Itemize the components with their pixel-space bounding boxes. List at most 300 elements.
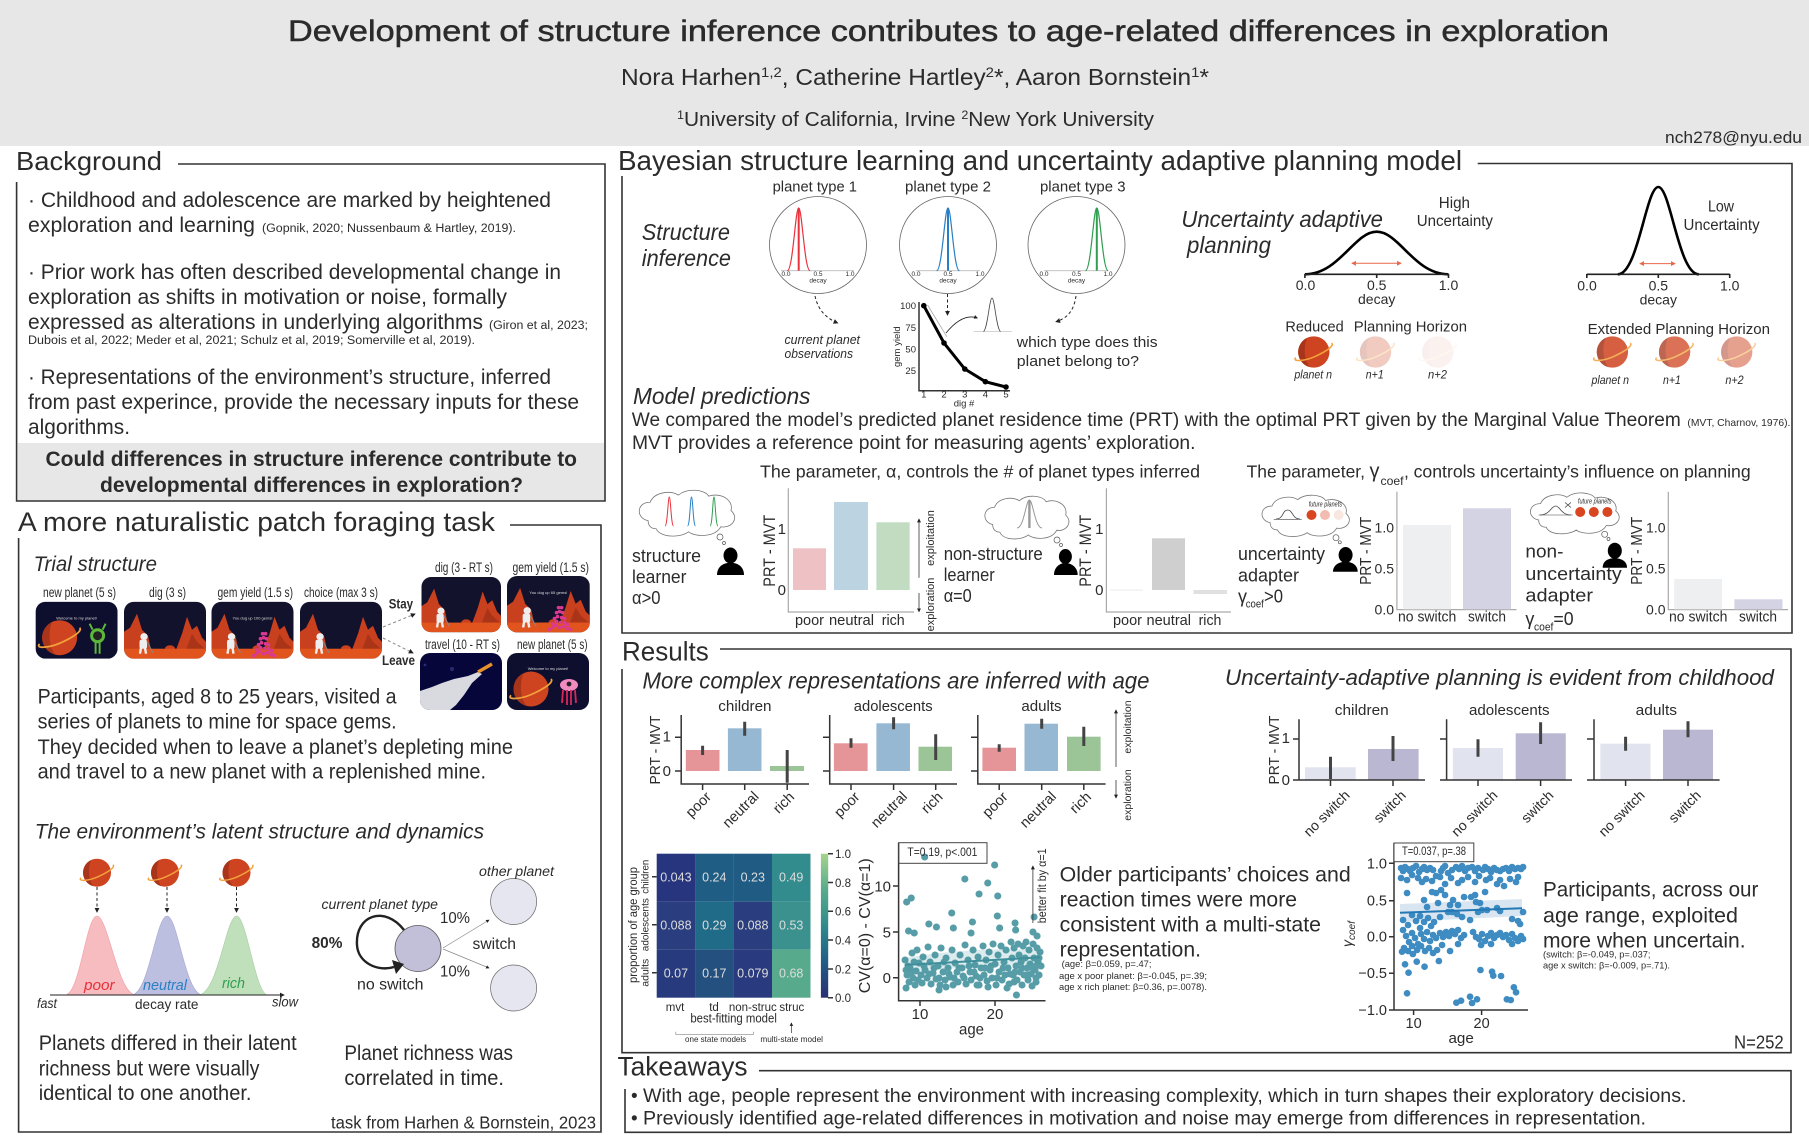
trial screens: You dug up 65 gems! xyxy=(529,590,567,595)
gamma parameter heading: The parameter, xyxy=(1247,462,1365,482)
exploited when uncertain text xyxy=(1543,879,1758,972)
current planet observations label xyxy=(784,332,861,361)
bar chart: uncertainty adapter xyxy=(1358,492,1516,626)
bar charts: planet type by age group: 0 xyxy=(663,763,671,780)
heatmap: best-fitting model by age group: proportion of age group xyxy=(628,867,640,983)
takeaway bullets xyxy=(631,1086,1686,1129)
planet switching diagram xyxy=(312,863,555,1011)
title: Development of structure inference contributes to age-related differences in exploration xyxy=(288,15,1609,48)
heatmap: best-fitting model by age group: best-fitting model xyxy=(690,1011,777,1026)
bar chart: non-structure learner: rich xyxy=(1199,612,1221,629)
reduced planning horizon: planet n xyxy=(1293,370,1332,382)
heatmap: best-fitting model by age group: 0.24 xyxy=(702,870,727,884)
planet switching diagram: current planet type xyxy=(322,896,438,912)
low uncertainty distribution: 0.0 xyxy=(1577,278,1597,294)
high uncertainty distribution: decay xyxy=(1358,291,1395,307)
decay rate distributions: rich xyxy=(222,975,245,992)
non-structure learner agent: learner xyxy=(944,565,995,585)
high uncertainty distribution: High xyxy=(1439,195,1470,212)
planet switching diagram: other planet xyxy=(479,863,555,879)
background text block: · Childhood and adolescence are marked by heightened xyxy=(28,189,551,212)
gem yield chart: 100 xyxy=(900,301,916,312)
bar chart: structure learner: 0 xyxy=(778,582,786,599)
affiliations: New York University xyxy=(968,109,1154,131)
model predictions text: (MVT, Charnov, 1976). xyxy=(1687,417,1790,429)
low uncertainty distribution: 1.0 xyxy=(1720,278,1740,294)
heading: background: Background xyxy=(16,146,162,176)
authors: Nora Harhen xyxy=(621,64,753,90)
uncertainty adapter agent: γ xyxy=(1238,586,1247,606)
bar chart: non-structure learner: poor xyxy=(1113,612,1142,629)
email: nch278@nyu.edu xyxy=(1665,128,1802,147)
exploited when uncertain text: more when uncertain. xyxy=(1543,929,1746,952)
heading: takeaways: Takeaways xyxy=(618,1052,748,1082)
extended planning horizon: n+1 xyxy=(1663,375,1681,387)
planet type distributions: 1.0 xyxy=(1103,271,1113,278)
structure learner agent: α>0 xyxy=(632,588,660,608)
structure learner agent: learner xyxy=(632,567,687,587)
bar chart: uncertainty adapter: PRT - MVT xyxy=(1358,516,1375,585)
planets text: identical to one another. xyxy=(39,1082,252,1105)
non-uncertainty adapter agent: coef xyxy=(1534,622,1554,634)
scatter: CV difference by age: 20 xyxy=(987,1006,1003,1023)
bar chart: uncertainty adapter: 0.5 xyxy=(1375,560,1394,576)
participants text: They decided when to leave a planet’s depleting mine xyxy=(38,736,513,759)
trial screens: dig (3 s) xyxy=(149,585,186,600)
which type question: which type does this xyxy=(1016,334,1158,351)
background text block: exploration and learning xyxy=(28,214,255,237)
background text block: expressed as alterations in underlying algorithms xyxy=(28,311,483,334)
scatter: gamma coefficient by age: 0.0 xyxy=(1367,930,1387,946)
planet switching diagram: no switch xyxy=(357,976,424,994)
bar chart: non-structure learner: PRT - MVT xyxy=(1076,515,1095,587)
bar charts: switch by age group: 0 xyxy=(1282,772,1290,789)
bar charts: planet type by age group: children xyxy=(718,698,772,715)
model predictions text: We compared the model’s predicted planet residence time (PRT) with the optimal PRT given by the Marginal Value Theorem xyxy=(632,409,1681,431)
planets text: Planets differed in their latent xyxy=(39,1032,297,1055)
heatmap: best-fitting model by age group: 0.17 xyxy=(702,966,727,980)
richness text xyxy=(344,1042,513,1090)
stat box: T=0.19, p<.001 xyxy=(907,845,978,859)
scatter: gamma coefficient by age: age xyxy=(1448,1030,1474,1047)
scatter: gamma coefficient by age xyxy=(1339,843,1528,1047)
richness text: Planet richness was xyxy=(344,1042,513,1065)
takeaway bullets: With age, people represent the environment with increasing complexity, which in turn shapes their exploratory decisions. xyxy=(643,1086,1686,1107)
heatmap: best-fitting model by age group: non-struc xyxy=(729,1002,777,1014)
multi-state finding text: age x rich planet: β=0.36, p=.0078). xyxy=(1059,982,1207,993)
current planet observations label: observations xyxy=(784,346,853,361)
bar charts: switch by age group: no switch xyxy=(1300,787,1353,839)
multi-state finding text xyxy=(1059,864,1351,993)
extended planning horizon xyxy=(1588,322,1770,387)
heatmap: best-fitting model by age group: td xyxy=(709,1002,719,1014)
heatmap: best-fitting model by age group: 0.53 xyxy=(779,918,803,932)
colorbar: 0.2 xyxy=(835,964,851,976)
scatter: CV difference by age: 10 xyxy=(912,1006,928,1023)
gem yield chart: 2 xyxy=(941,390,947,401)
high uncertainty distribution xyxy=(1296,195,1493,307)
low uncertainty distribution: 0.5 xyxy=(1649,278,1668,294)
scatter: CV difference by age: CV(α=0) - CV(α=1) xyxy=(857,858,874,993)
uncertainty adaptive planning label: planning xyxy=(1186,232,1271,258)
panel: patch foraging task xyxy=(18,507,601,1133)
bar charts: planet type by age group xyxy=(647,698,1134,832)
high uncertainty distribution: 1.0 xyxy=(1439,277,1458,293)
bar charts: planet type by age group: neutral xyxy=(1017,789,1060,832)
bar chart: uncertainty adapter: switch xyxy=(1468,610,1506,626)
decay rate distributions: slow xyxy=(272,994,299,1010)
background text block: · Prior work has often described developmental change in xyxy=(28,261,561,284)
heatmap: best-fitting model by age group: 0.079 xyxy=(737,966,768,980)
gamma parameter heading: , xyxy=(1404,462,1409,482)
chart: adults switch xyxy=(1587,719,1720,786)
trial screens: gem yield (1.5 s) xyxy=(512,560,589,575)
exploited when uncertain text: age range, exploited xyxy=(1543,904,1738,927)
heatmap: best-fitting model by age group: struc xyxy=(779,1002,805,1014)
bar charts: switch by age group: children xyxy=(1335,702,1389,719)
background text block: Dubois et al, 2022; Meder et al, 2021; Schulz et al, 2019; Somerville et al, 2019). xyxy=(28,335,475,347)
structure inference label: Structure xyxy=(642,219,730,245)
scatter: gamma coefficient by age: 1.0 xyxy=(1367,856,1387,872)
gem yield chart xyxy=(892,298,1012,410)
colorbar: 0.0 xyxy=(835,993,851,1005)
multi-state finding text: representation. xyxy=(1060,939,1201,962)
stat box xyxy=(1394,843,1474,862)
bar charts: planet type by age group: rich xyxy=(919,789,946,817)
structure learner agent xyxy=(632,490,744,608)
decay rate distributions: neutral xyxy=(143,977,188,994)
bar charts: planet type by age group: neutral xyxy=(720,789,763,832)
reduced planning horizon: Planning Horizon xyxy=(1354,320,1467,336)
affiliations: University of California, Irvine xyxy=(684,109,961,131)
bar chart: non-structure learner: 1 xyxy=(1095,521,1104,538)
authors: * xyxy=(1199,64,1209,90)
uncertainty adaptive planning label: Uncertainty adaptive xyxy=(1181,206,1383,232)
structure inference label: inference xyxy=(642,245,731,271)
bar chart: structure learner: neutral xyxy=(829,612,874,629)
exploited when uncertain text: age x switch: β=-0.009, p=.71). xyxy=(1543,961,1670,972)
stay or leave choice arrows: Stay xyxy=(389,596,413,612)
which type question xyxy=(1016,334,1158,370)
bar charts: switch by age group: PRT - MVT xyxy=(1266,716,1283,784)
background text block: (Gopnik, 2020; Nussenbaum & Hartley, 2019). xyxy=(262,223,516,235)
planet type distributions xyxy=(770,179,1126,323)
stat box xyxy=(899,843,987,863)
planet type distributions: 0.5 xyxy=(1072,271,1081,278)
multi-state finding text: age x poor planet: β=-0.045, p=.39; xyxy=(1059,971,1207,982)
non-uncertainty adapter agent: adapter xyxy=(1525,586,1593,606)
heading: results: Results xyxy=(622,637,709,667)
bar charts: switch by age group: switch xyxy=(1518,787,1556,826)
chart: adults planet type xyxy=(971,715,1106,790)
exploited when uncertain text: (switch: β=-0.049, p=.037; xyxy=(1543,949,1650,960)
bar charts: planet type by age group: PRT - MVT xyxy=(647,716,664,784)
heatmap: best-fitting model by age group: adolescents xyxy=(640,898,652,951)
uncertainty adapter agent: >0 xyxy=(1264,586,1283,606)
bar chart: non-uncertainty adapter xyxy=(1629,492,1788,626)
bar chart: non-uncertainty adapter: 1.0 xyxy=(1646,520,1666,536)
gem yield chart: 25 xyxy=(905,366,916,377)
uncertainty adapter agent: adapter xyxy=(1238,566,1299,586)
colorbar: 0.6 xyxy=(835,907,851,919)
panel: model xyxy=(618,145,1792,634)
trial screens: new planet (5 s) xyxy=(43,585,116,600)
bar chart: non-uncertainty adapter: no switch xyxy=(1669,610,1727,626)
scatter: CV difference by age: 5 xyxy=(883,924,891,942)
model predictions heading: Model predictions xyxy=(633,383,811,409)
gem yield chart: 75 xyxy=(905,323,916,334)
chart: adolescents planet type xyxy=(823,715,957,790)
gem yield chart: 4 xyxy=(983,390,988,401)
heatmap: best-fitting model by age group: 0.043 xyxy=(660,870,692,884)
planet switching diagram: 10% xyxy=(440,910,470,927)
planet type distributions: 0.0 xyxy=(781,271,791,278)
authors: 1 xyxy=(1191,64,1200,80)
scatter: gamma coefficient by age: γ xyxy=(1339,940,1355,947)
low uncertainty distribution: Low xyxy=(1708,199,1735,216)
takeaway bullets: • xyxy=(631,1108,638,1129)
scatter: gamma coefficient by age: −0.5 xyxy=(1358,966,1387,982)
subheading: uncertainty-adaptive planning: Uncertainty-adaptive planning is evident from childhood xyxy=(1225,665,1775,690)
planet type distributions: planet type 2 xyxy=(905,179,991,196)
heatmap: best-fitting model by age group: children xyxy=(640,860,652,894)
chart: children planet type xyxy=(675,715,809,790)
planet type distributions: 0.5 xyxy=(813,271,823,278)
multi-state finding text: consistent with a multi-state xyxy=(1060,914,1321,937)
affiliations: 2 xyxy=(961,108,969,122)
bar charts: planet type by age group: adolescents xyxy=(854,698,933,715)
scatter: gamma coefficient by age: 10 xyxy=(1406,1016,1422,1032)
bar charts: planet type by age group: adults xyxy=(1021,698,1062,715)
participants text xyxy=(38,686,513,784)
bar chart: structure learner: rich xyxy=(882,612,905,629)
trial screens: choice (max 3 s) xyxy=(304,585,378,600)
planet type distributions: planet type 3 xyxy=(1040,179,1126,196)
bar charts: switch by age group: no switch xyxy=(1448,787,1500,839)
high uncertainty distribution: Uncertainty xyxy=(1417,213,1493,230)
subheading: latent structure: The environment’s latent structure and dynamics xyxy=(35,820,484,844)
scatter: gamma coefficient by age: 0.5 xyxy=(1367,894,1387,910)
bar charts: switch by age group: no switch xyxy=(1595,787,1648,839)
heatmap: best-fitting model by age group: 0.088 xyxy=(660,918,692,932)
uncertainty adapter agent: future planets xyxy=(1309,502,1342,509)
trial screens: travel (10 - RT s) xyxy=(425,637,500,652)
sample size: N=252 xyxy=(1734,1032,1784,1052)
structure learner agent: structure xyxy=(632,546,701,566)
heatmap: best-fitting model by age group: 0.49 xyxy=(779,870,803,884)
bar charts: switch by age group: adults xyxy=(1636,702,1677,719)
participants text: and travel to a new planet with a replenished mine. xyxy=(38,761,486,784)
participants text: Participants, aged 8 to 25 years, visited a xyxy=(38,686,397,708)
richness text: correlated in time. xyxy=(344,1067,504,1090)
bar charts: planet type by age group: 1 xyxy=(663,729,671,746)
background text block: from past experince, provide the necessary inputs for these xyxy=(28,391,579,414)
scatter: CV difference by age xyxy=(857,843,1049,1038)
non-uncertainty adapter agent: future planets xyxy=(1578,498,1612,505)
low uncertainty distribution: Uncertainty xyxy=(1684,217,1760,234)
scatter: gamma coefficient by age: −1.0 xyxy=(1358,1003,1387,1019)
trial screens: new planet (5 s) xyxy=(517,637,588,652)
exploited when uncertain text: Participants, across our xyxy=(1543,879,1758,902)
non-uncertainty adapter agent: non- xyxy=(1525,541,1563,561)
reduced planning horizon xyxy=(1285,320,1467,382)
stat box: T=0.037, p=.38 xyxy=(1402,846,1466,858)
background text block: · Representations of the environment’s structure, inferred xyxy=(28,366,551,389)
panel: takeaways xyxy=(618,1052,1791,1132)
low uncertainty distribution xyxy=(1577,187,1760,308)
subheading: trial structure: Trial structure xyxy=(34,553,157,576)
bar chart: non-uncertainty adapter: 0.0 xyxy=(1646,601,1666,617)
decay rate distributions xyxy=(37,859,299,1012)
research question callout: Could differences in structure inference contribute to xyxy=(46,448,577,471)
colorbar: 0.4 xyxy=(835,935,852,947)
bar chart: structure learner: poor xyxy=(795,612,824,629)
non-structure learner agent: α=0 xyxy=(944,586,972,606)
scatter: CV difference by age: 0 xyxy=(883,970,891,987)
heatmap: best-fitting model by age group: mvt xyxy=(666,1002,685,1014)
trial screens xyxy=(36,560,590,710)
gem yield chart: 3 xyxy=(962,390,967,401)
planet type distributions: 1.0 xyxy=(975,271,985,278)
research question callout: developmental differences in exploration? xyxy=(100,474,523,497)
stay or leave choice arrows xyxy=(382,596,415,668)
non-uncertainty adapter agent: uncertainty xyxy=(1525,564,1622,584)
background text block: algorithms. xyxy=(28,416,130,439)
bar chart: non-uncertainty adapter: PRT - MVT xyxy=(1629,516,1646,585)
source note: task from Harhen & Bornstein, 2023 xyxy=(331,1113,596,1133)
background text block: exploration as shifts in motivation or noise, formally xyxy=(28,286,508,309)
bar charts: planet type by age group: exploration xyxy=(1122,769,1134,821)
structure inference label xyxy=(642,219,731,271)
bar chart: uncertainty adapter: 0.0 xyxy=(1375,601,1394,617)
bar charts: switch by age group xyxy=(1266,702,1720,839)
trial screens: dig (3 - RT s) xyxy=(435,560,493,575)
bar charts: planet type by age group: rich xyxy=(1067,789,1095,817)
bar chart: structure learner: PRT - MVT xyxy=(760,515,779,587)
extended planning horizon: Extended Planning Horizon xyxy=(1588,322,1770,338)
planet type distributions: 0.0 xyxy=(1039,271,1049,278)
trial screens: Welcome to my planet! xyxy=(56,616,97,621)
gem yield chart: gem yield xyxy=(892,326,903,367)
trial screens: gem yield (1.5 s) xyxy=(218,585,293,600)
heatmap: best-fitting model by age group: 0.23 xyxy=(741,870,765,884)
background text block: (Giron et al, 2023; xyxy=(489,320,588,332)
scatter: gamma coefficient by age: coef xyxy=(1347,920,1358,940)
authors: *, Aaron Bornstein xyxy=(994,64,1191,90)
multi-state finding text: Older participants’ choices and xyxy=(1060,864,1351,887)
takeaway bullets: • xyxy=(631,1086,638,1107)
bar chart: non-structure learner: neutral xyxy=(1146,612,1191,629)
research question callout xyxy=(46,448,577,497)
colorbar xyxy=(821,849,852,1005)
scatter: gamma coefficient by age: 20 xyxy=(1474,1016,1490,1032)
heading: task: A more naturalistic patch foraging task xyxy=(18,507,496,537)
bar chart: uncertainty adapter: 1.0 xyxy=(1375,520,1394,536)
non-uncertainty adapter agent: γ xyxy=(1525,609,1534,629)
model predictions text xyxy=(632,409,1790,454)
background text block xyxy=(28,189,588,439)
which type question: planet belong to? xyxy=(1017,353,1139,370)
planet type distributions: planet type 1 xyxy=(773,179,857,196)
uncertainty adapter agent: coef xyxy=(1246,599,1265,611)
trial screens: Welcome to my planet! xyxy=(528,666,568,671)
bar charts: switch by age group: adolescents xyxy=(1469,702,1550,719)
bar chart: structure learner xyxy=(760,488,937,631)
colorbar: 0.8 xyxy=(835,878,851,890)
planets text: richness but were visually xyxy=(39,1058,260,1080)
heatmap: best-fitting model by age group: 0.29 xyxy=(702,918,727,932)
bar chart: uncertainty adapter: no switch xyxy=(1398,610,1456,626)
uncertainty adaptive planning label xyxy=(1181,206,1383,258)
model predictions text: MVT provides a reference point for measuring agents’ exploration. xyxy=(632,432,1196,454)
scatter: CV difference by age: age xyxy=(959,1021,984,1038)
non-structure learner agent xyxy=(944,496,1078,606)
reduced planning horizon: n+2 xyxy=(1428,370,1448,382)
bar charts: planet type by age group: rich xyxy=(770,789,798,817)
bar chart: non-uncertainty adapter: 0.5 xyxy=(1646,560,1666,576)
bar charts: switch by age group: 1 xyxy=(1282,730,1290,747)
bar charts: planet type by age group: poor xyxy=(683,789,715,821)
heatmap: best-fitting model by age group xyxy=(628,849,852,1044)
uncertainty adapter agent xyxy=(1238,495,1358,611)
affiliations: 1 xyxy=(677,108,684,122)
non-uncertainty adapter agent xyxy=(1525,493,1627,634)
gamma parameter heading: γ xyxy=(1370,461,1380,483)
gamma parameter heading: coef xyxy=(1380,474,1404,488)
heatmap: best-fitting model by age group: 0.68 xyxy=(779,966,803,980)
reduced planning horizon: n+1 xyxy=(1366,370,1384,382)
stay or leave choice arrows: Leave xyxy=(382,652,415,668)
bar chart: non-structure learner: 0 xyxy=(1095,582,1104,599)
bar charts: planet type by age group: poor xyxy=(980,789,1012,821)
planet switching diagram: 80% xyxy=(312,935,343,952)
gem yield chart: 1 xyxy=(921,390,926,401)
subheading: representations: More complex representations are inferred with age xyxy=(642,667,1150,693)
bar charts: switch by age group: switch xyxy=(1665,787,1704,826)
heatmap: best-fitting model by age group: adults xyxy=(640,959,652,987)
high uncertainty distribution: 0.5 xyxy=(1367,277,1387,293)
participants text: series of planets to mine for space gems. xyxy=(38,711,397,734)
high uncertainty distribution: 0.0 xyxy=(1296,277,1315,293)
heading: model: Bayesian structure learning and uncertainty adaptive planning model xyxy=(618,145,1462,176)
authors: , Catherine Hartley xyxy=(782,64,986,90)
planet type distributions: decay xyxy=(809,278,827,284)
planet type distributions: 1.0 xyxy=(845,271,855,278)
current planet observations label: current planet xyxy=(784,332,861,347)
decay rate distributions: decay rate xyxy=(135,997,198,1012)
gem yield chart: 50 xyxy=(905,344,916,356)
heatmap: best-fitting model by age group: 0.07 xyxy=(664,966,688,980)
bar chart: non-structure learner xyxy=(1076,488,1231,629)
bar chart: structure learner: exploration xyxy=(925,578,937,631)
bar charts: planet type by age group: neutral xyxy=(868,789,911,832)
bar chart: structure learner: exploitation xyxy=(925,510,937,566)
bar chart: structure learner: 1 xyxy=(778,521,786,538)
bar charts: switch by age group: switch xyxy=(1370,787,1409,826)
multi-state finding text: reaction times were more xyxy=(1060,889,1297,912)
planet switching diagram: switch xyxy=(472,936,516,953)
panel: results xyxy=(622,637,1791,1053)
alpha parameter heading: The parameter, α, controls the # of planet types inferred xyxy=(760,462,1200,482)
panel: background xyxy=(16,146,605,501)
decay rate distributions: fast xyxy=(37,996,58,1011)
gamma parameter heading: controls uncertainty’s influence on planning xyxy=(1414,462,1751,482)
non-uncertainty adapter agent: =0 xyxy=(1553,609,1574,629)
low uncertainty distribution: decay xyxy=(1640,292,1677,308)
gem yield chart: dig # xyxy=(954,399,975,410)
chart: children switch xyxy=(1293,719,1425,786)
bar charts: planet type by age group: poor xyxy=(832,789,864,821)
